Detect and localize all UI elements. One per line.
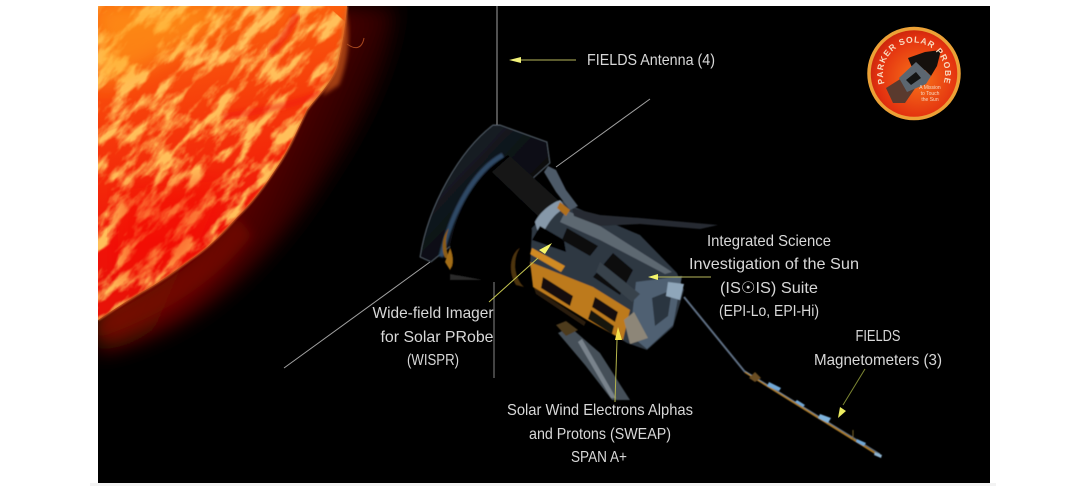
arrow: FIELDS antenna [509, 57, 576, 63]
mission patch badge [867, 26, 961, 120]
mission patch badge: PARKER SOLAR PROBE [877, 36, 951, 84]
label: FIELDS Antenna: FIELDS Antenna (4) [587, 52, 715, 69]
arrow: magnetometers [838, 369, 865, 418]
mission patch badge: to Touch [921, 91, 940, 97]
heat shield [420, 125, 550, 262]
FIELDS antenna wires [284, 6, 650, 378]
label: WISPR [372, 305, 494, 369]
shield rim highlight [441, 155, 503, 257]
label: SWEAP: Solar Wind Electrons Alphas [507, 402, 693, 419]
label: SWEAP: and Protons (SWEAP) [529, 426, 671, 443]
gold shield glints [443, 228, 449, 258]
sun with corona [98, 6, 395, 352]
label: ISOIS suite: Integrated Science [707, 233, 831, 250]
upper strut [572, 208, 718, 229]
solar panels [532, 226, 566, 252]
callout arrows [489, 57, 865, 418]
label: ISOIS suite [689, 233, 859, 320]
sun limb [98, 6, 347, 320]
label: ISOIS suite: (EPI-Lo, EPI-Hi) [719, 303, 819, 320]
spacecraft [420, 125, 882, 458]
arrow: WISPR [489, 243, 552, 302]
magnetometer boom [745, 372, 880, 456]
cooling radiator strip [558, 327, 630, 400]
mission patch badge: the Sun [921, 97, 939, 103]
arrow: SWEAP [615, 327, 622, 402]
label: magnetometers: FIELDS [856, 328, 900, 345]
label: ISOIS suite: (IS☉IS) Suite [720, 280, 818, 297]
thermal cone [448, 155, 560, 280]
label: ISOIS suite: Investigation of the Sun [689, 256, 859, 273]
mission patch badge: A Mission [919, 85, 941, 91]
faint bottom edge [90, 483, 996, 486]
bus body [530, 200, 684, 350]
label: magnetometers: Magnetometers (3) [814, 352, 942, 369]
gold panel block [530, 248, 565, 272]
label: SWEAP [507, 402, 693, 466]
label: SWEAP: SPAN A+ [571, 449, 627, 466]
label: magnetometers [814, 328, 942, 369]
patch spacecraft [886, 50, 941, 103]
arrow: ISOIS [648, 274, 711, 280]
label: WISPR: for Solar PRobe [380, 329, 494, 346]
label: WISPR: (WISPR) [407, 352, 459, 369]
label: WISPR: Wide-field Imager [372, 305, 494, 322]
